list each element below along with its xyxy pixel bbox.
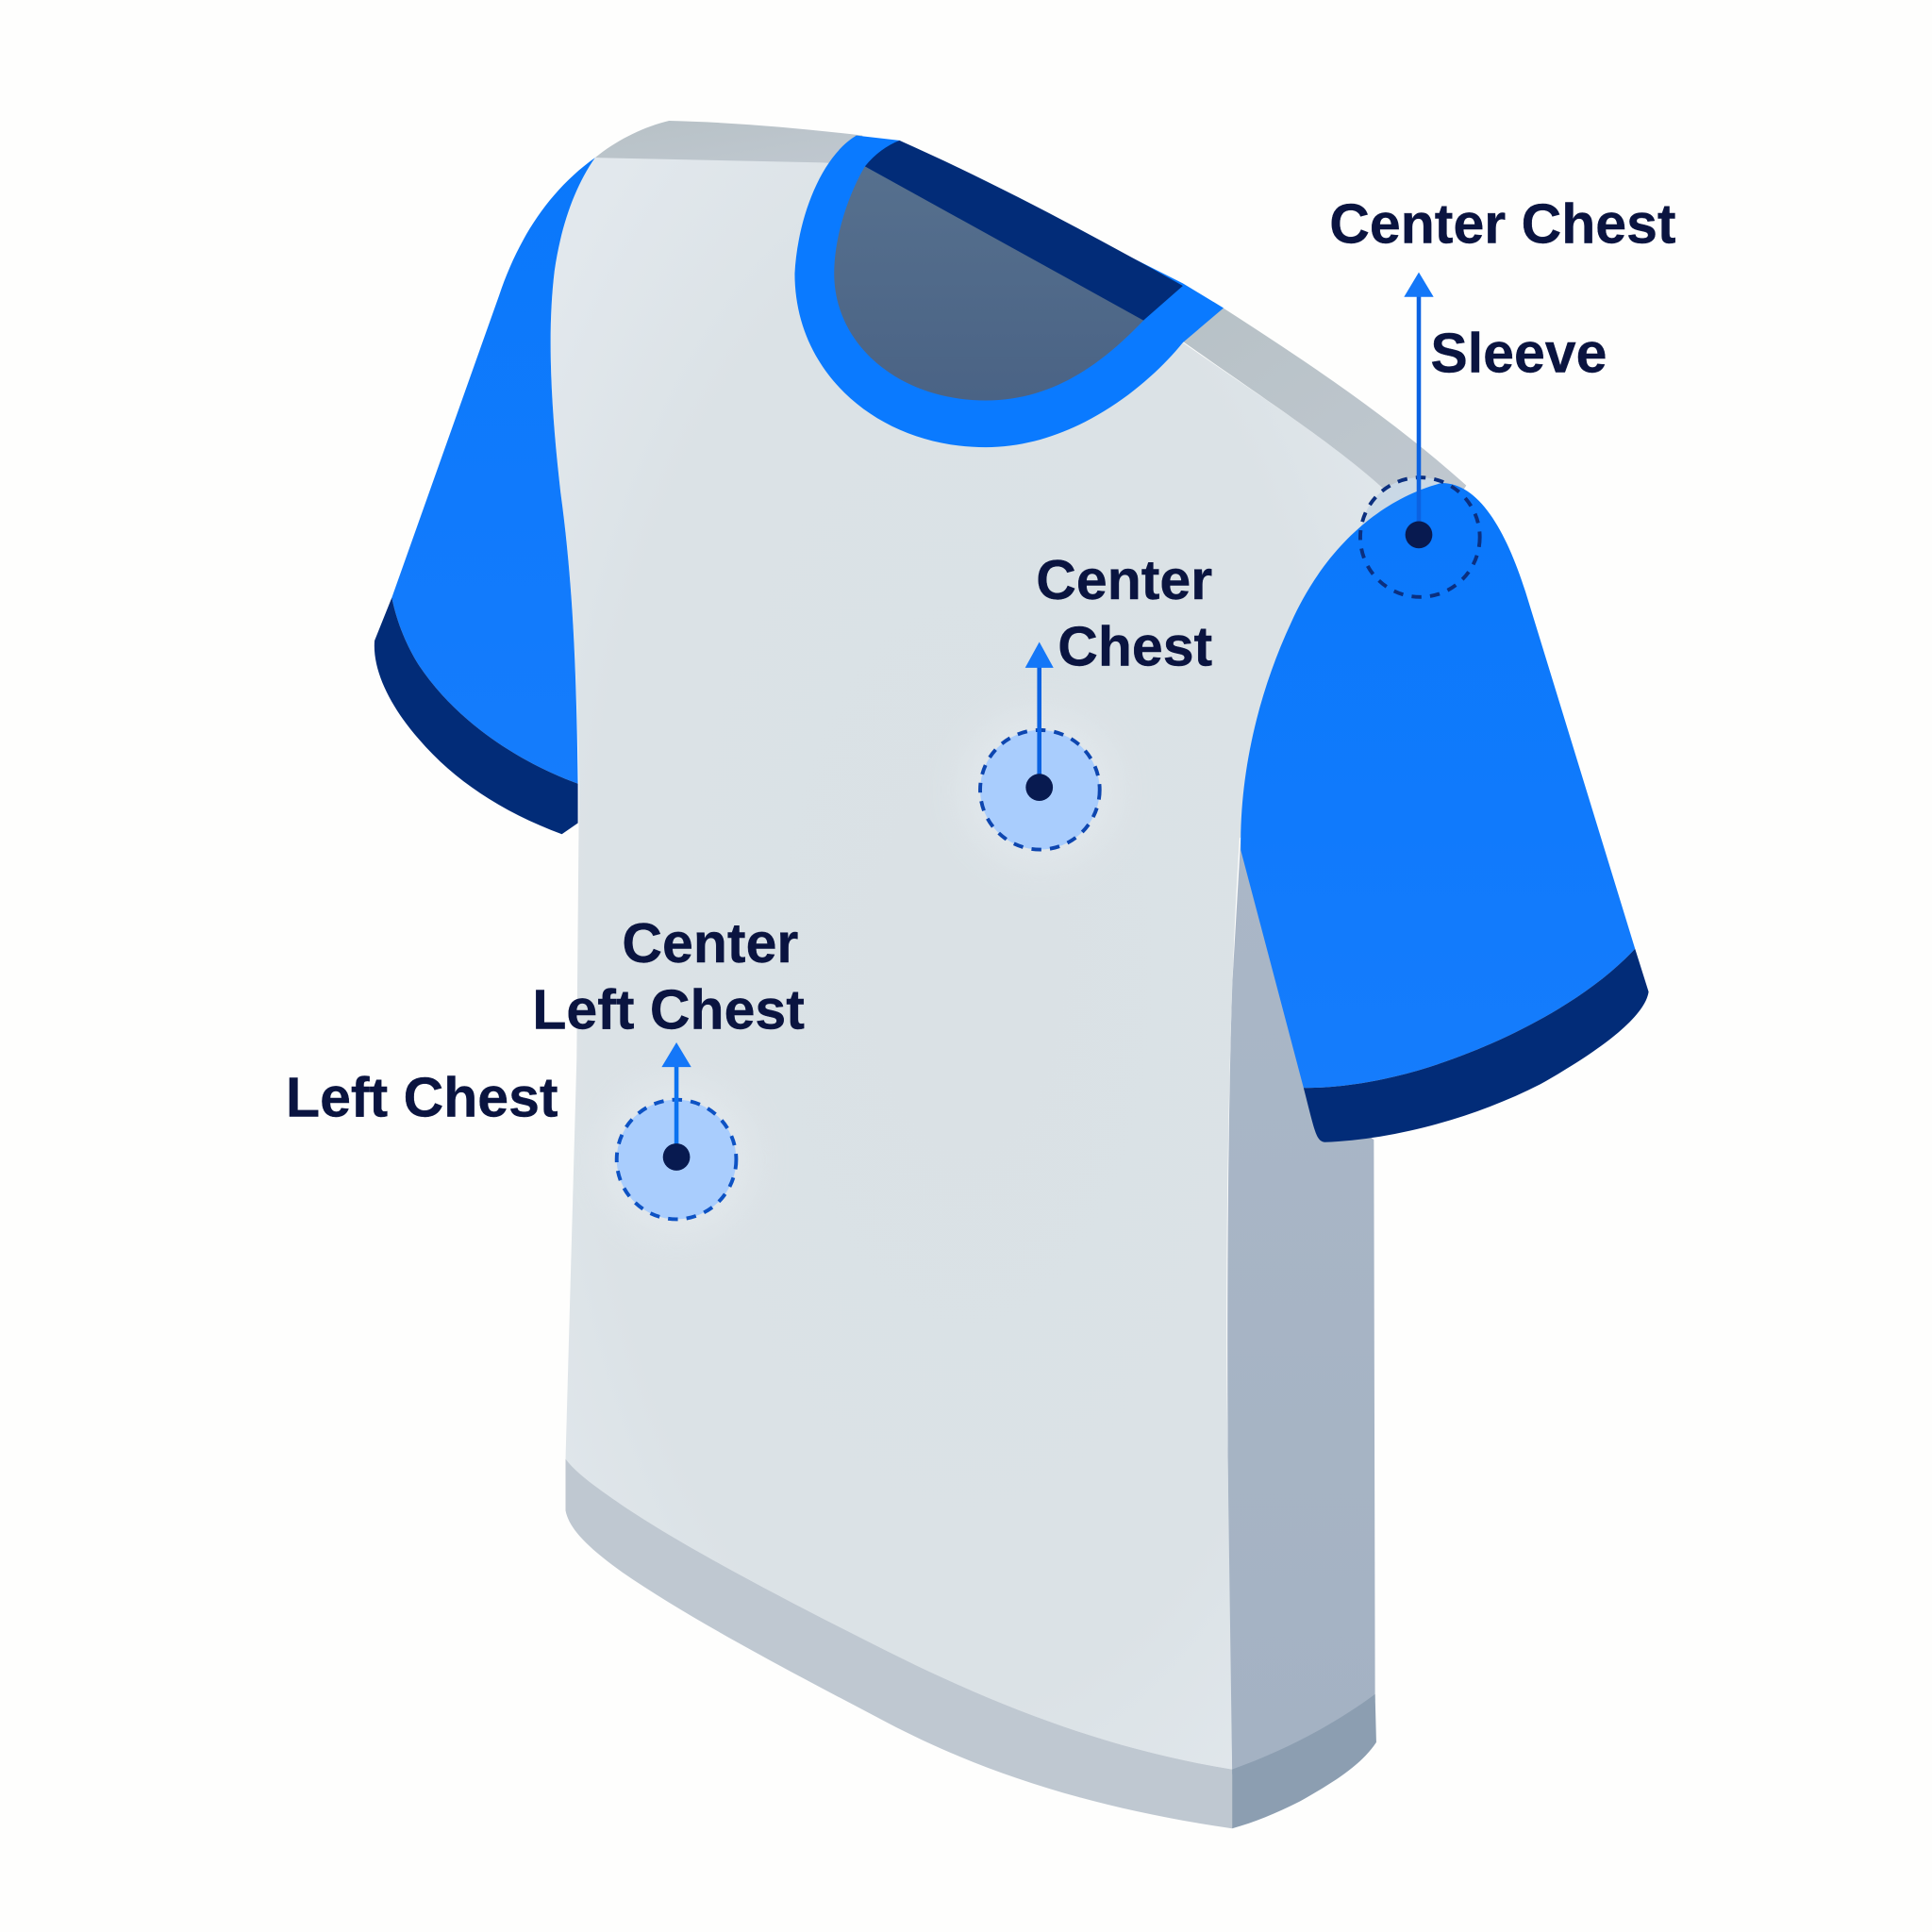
label: center left chest: Center (622, 912, 798, 974)
label: center chest top: Center Chest (1329, 192, 1676, 255)
side hem (1232, 1694, 1376, 1828)
label: center chest middle: Chest (1058, 615, 1212, 677)
front hem (566, 1458, 1232, 1828)
neck opening (834, 166, 1146, 400)
soft glow around center chest marker (958, 708, 1122, 871)
back collar (865, 141, 1183, 321)
left sleeve (391, 158, 595, 784)
marker: sleeve (1360, 273, 1480, 597)
right sleeve cuff (1304, 949, 1649, 1142)
label: center left chest: Left Chest (532, 979, 805, 1041)
collar (794, 136, 1224, 447)
marker: center chest (980, 641, 1100, 850)
shirt side panel (1227, 838, 1375, 1774)
label: left chest: Left Chest (286, 1066, 558, 1128)
label: center chest middle: Center (1036, 549, 1212, 611)
label: sleeve: Sleeve (1430, 322, 1607, 384)
marker: left chest (617, 1042, 736, 1219)
shirt front panel (551, 158, 1382, 1770)
soft glow around left chest marker (595, 1078, 758, 1241)
left shoulder seam (595, 121, 862, 165)
right shoulder seam (1171, 302, 1466, 506)
sleeve marker tint (1360, 477, 1480, 597)
right sleeve (1241, 483, 1635, 1088)
left sleeve cuff (375, 597, 578, 834)
